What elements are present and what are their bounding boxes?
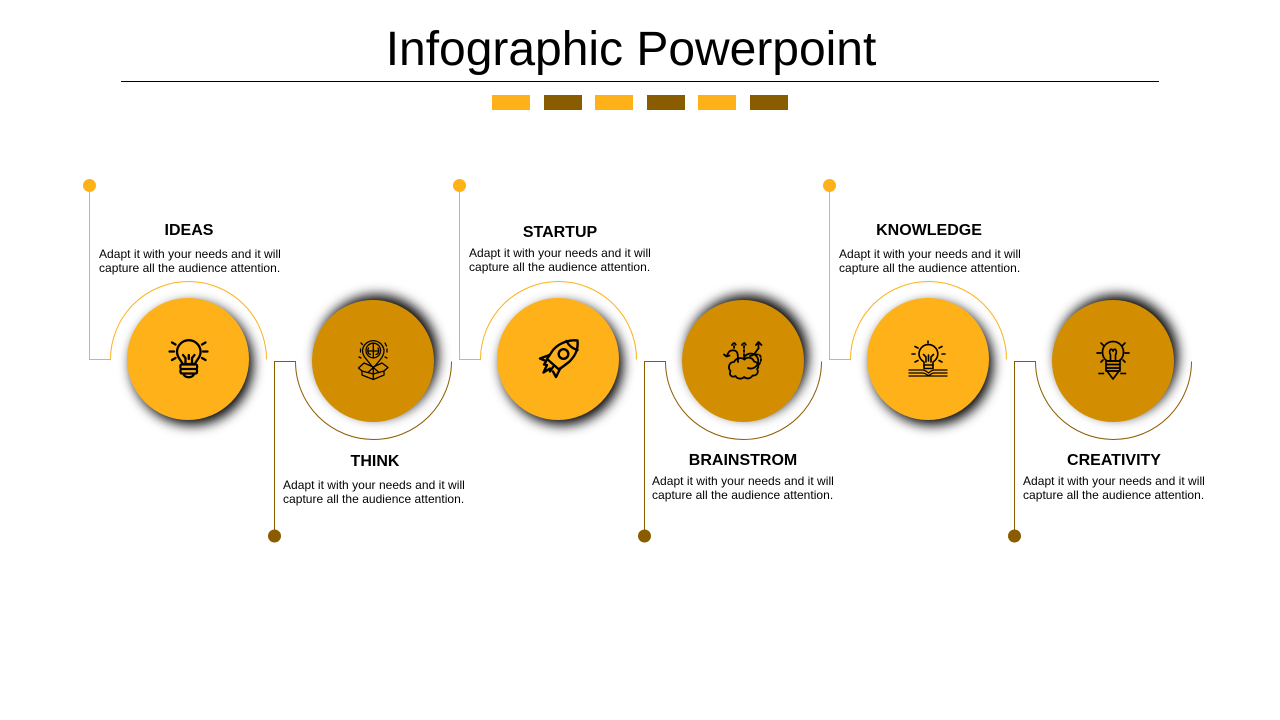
icon: brain bulb in box <box>358 340 389 380</box>
body: knowledge: Adapt it with your needs and it will <box>839 247 1021 261</box>
heading: knowledge: KNOWLEDGE <box>876 222 982 239</box>
body: ideas: Adapt it with your needs and it will <box>99 247 281 261</box>
body: think: capture all the audience attention. <box>283 492 464 506</box>
body: knowledge: capture all the audience attention. <box>839 261 1020 275</box>
text: creativity <box>1023 452 1205 502</box>
body: think <box>283 478 465 506</box>
icon: brain with arrows <box>723 341 762 380</box>
heading: startup: STARTUP <box>523 224 597 241</box>
icon: rocket <box>538 339 579 378</box>
body: ideas <box>99 247 281 275</box>
heading: creativity: CREATIVITY <box>1067 452 1161 469</box>
body: ideas: capture all the audience attention. <box>99 261 280 275</box>
icon: light bulb <box>168 339 209 378</box>
circle: brainstorm <box>682 300 804 422</box>
heading: ideas: IDEAS <box>165 222 213 239</box>
body: think: Adapt it with your needs and it will <box>283 478 465 492</box>
step 3 connector <box>453 179 636 360</box>
body: creativity: Adapt it with your needs and it will <box>1023 474 1205 488</box>
text: think <box>283 453 465 506</box>
circle: knowledge <box>867 298 989 420</box>
body: startup <box>469 246 651 274</box>
body: creativity <box>1023 474 1205 502</box>
step 1 connector <box>83 179 266 360</box>
body: creativity: capture all the audience attention. <box>1023 488 1204 502</box>
step 6 connector <box>1008 362 1192 542</box>
step 5 connector <box>823 179 1006 360</box>
body: knowledge <box>839 247 1021 275</box>
body: brainstorm: Adapt it with your needs and it will <box>652 474 834 488</box>
body: brainstorm <box>652 474 834 502</box>
icon: bulb over open book <box>908 340 948 377</box>
step 2 connector <box>268 362 452 542</box>
circle: startup <box>497 298 619 420</box>
body: startup: capture all the audience attention. <box>469 260 650 274</box>
title: Infographic Powerpoint <box>386 23 876 76</box>
heading: brainstorm: BRAINSTROM <box>689 452 797 469</box>
circle: ideas <box>127 298 249 420</box>
heading: think: THINK <box>351 453 399 470</box>
text: brainstorm <box>652 452 834 502</box>
text: knowledge <box>839 222 1021 275</box>
body: brainstorm: capture all the audience attention. <box>652 488 833 502</box>
body: startup: Adapt it with your needs and it will <box>469 246 651 260</box>
circle: think <box>312 300 434 422</box>
icon: pencil bulb <box>1096 340 1130 380</box>
text: startup <box>469 224 651 274</box>
colour swatch row <box>492 95 788 110</box>
text: ideas <box>99 222 281 275</box>
step 4 connector <box>638 362 822 542</box>
circle: creativity <box>1052 300 1174 422</box>
